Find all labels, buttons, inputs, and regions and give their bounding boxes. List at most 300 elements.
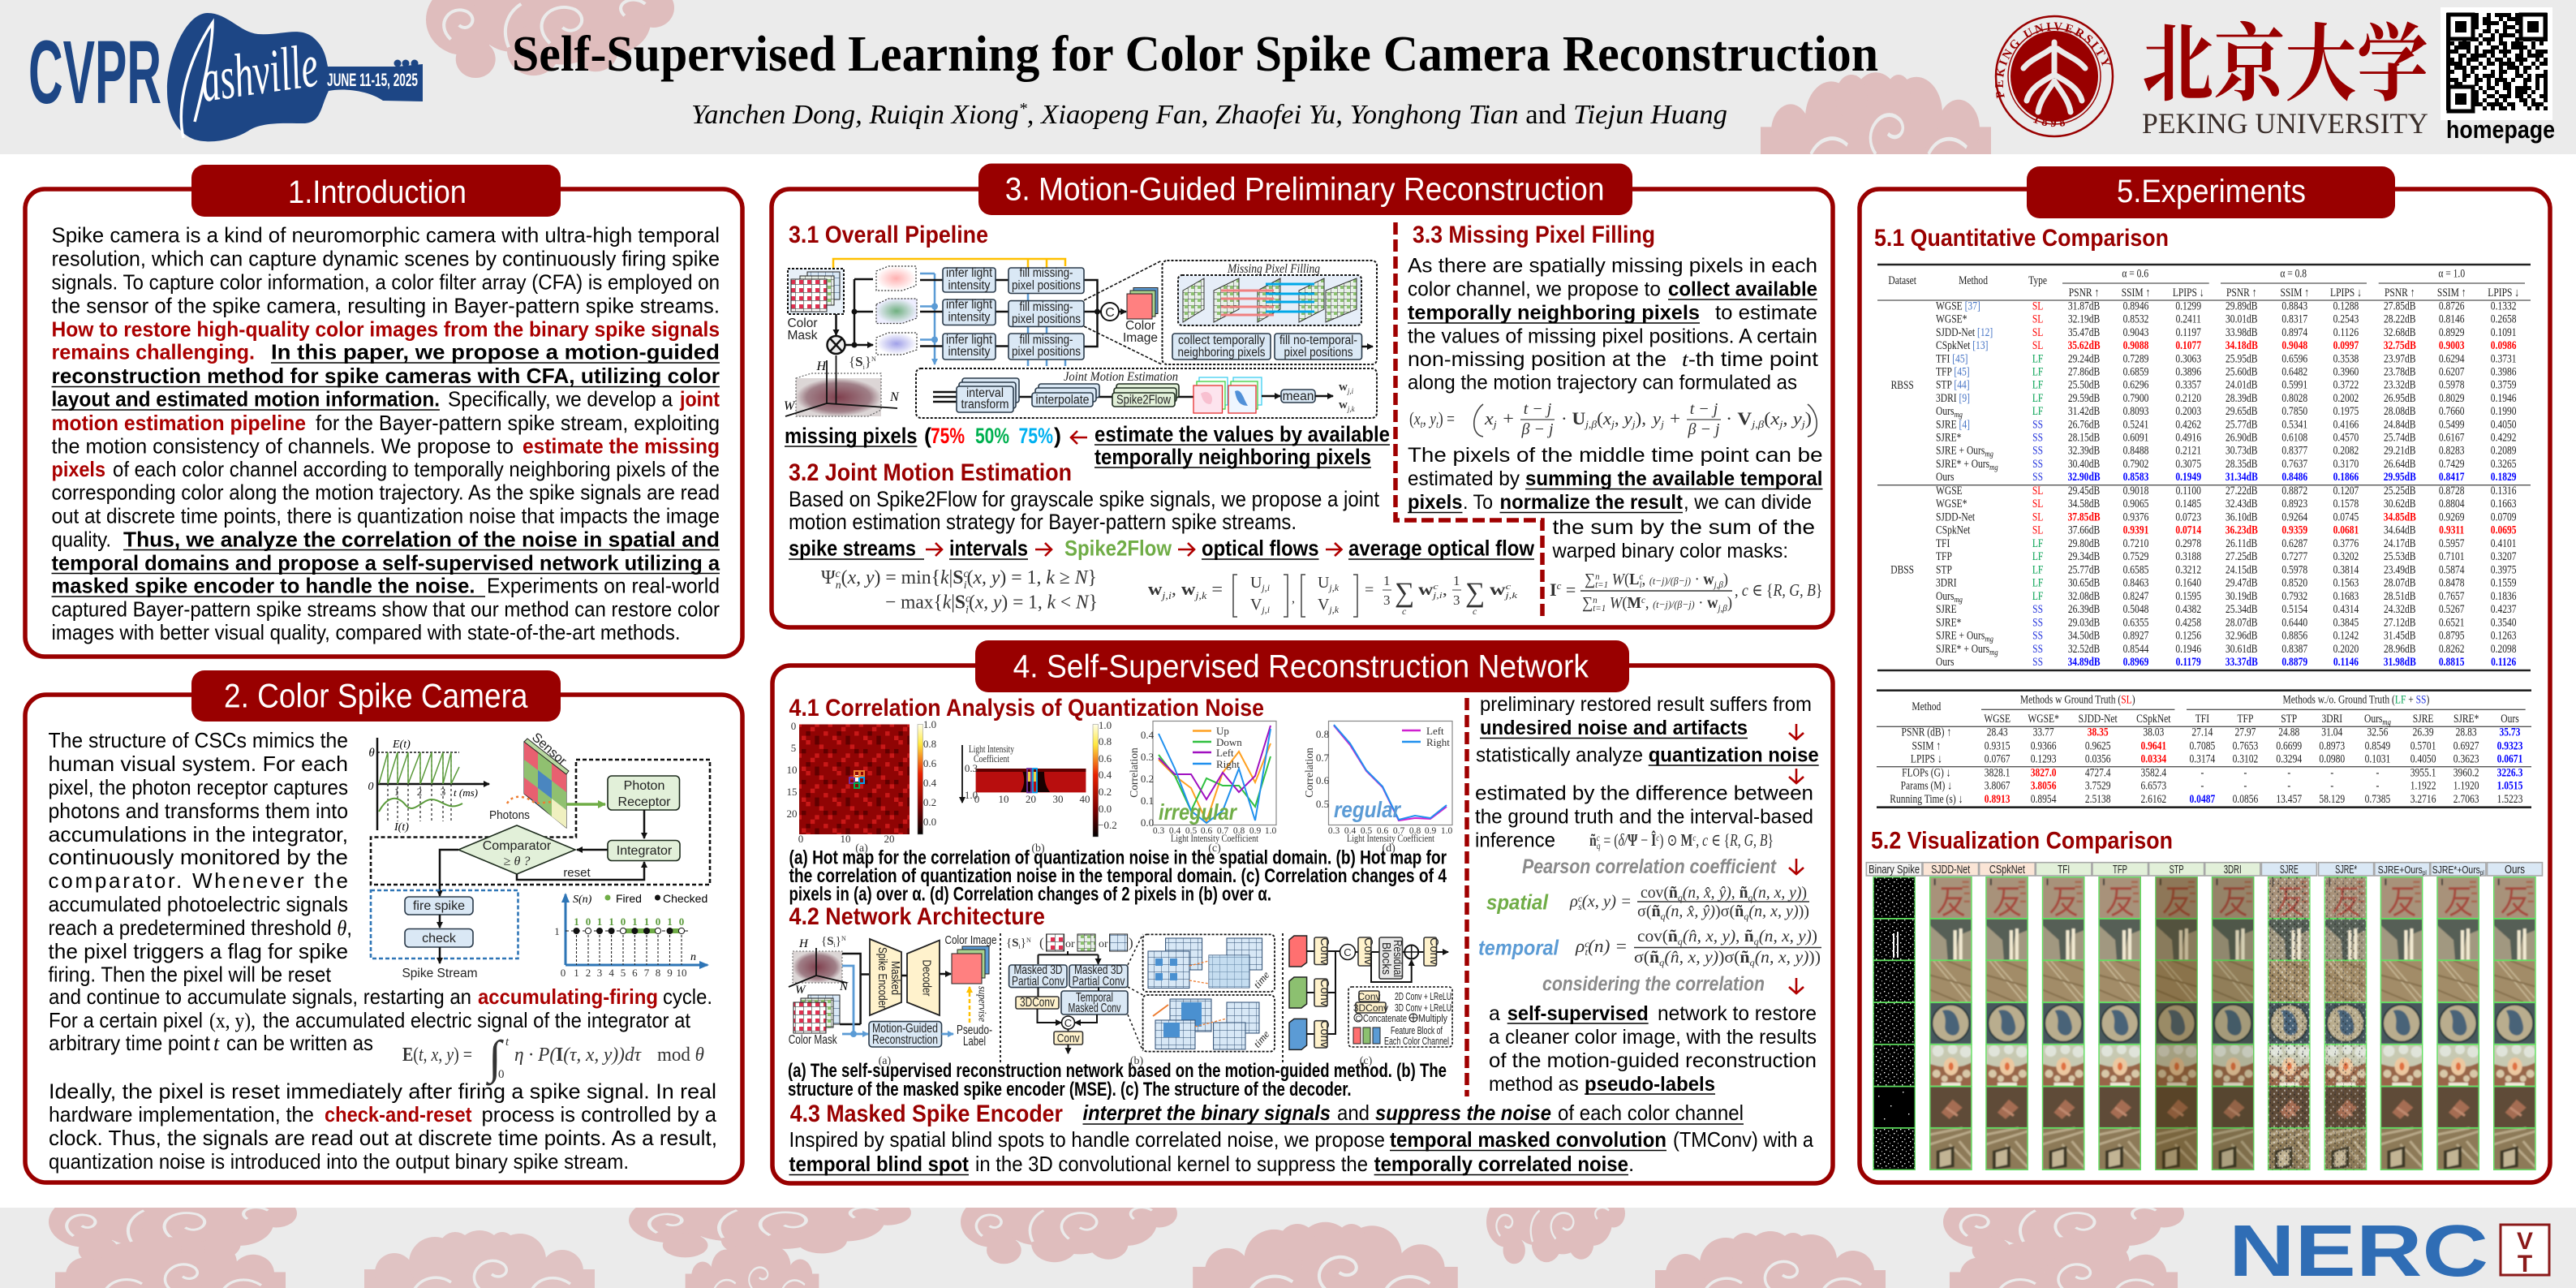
chart: (d) correlation changes, two pixels: 0.7 — [1316, 752, 1330, 764]
table: per-alpha quantitative results: 32.19dB — [2068, 312, 2100, 325]
table: real-world and complexity results: - — [2287, 765, 2290, 779]
text block: check-and-reset: hardware implementation, the — [49, 1102, 314, 1126]
equation: temporal correlation: t — [1585, 946, 1589, 958]
chart: (a) spatial hot map — [787, 718, 937, 855]
text block: CSC structure: continuously monitored by the — [49, 845, 348, 869]
table: per-alpha quantitative results: 0.3212 — [2175, 562, 2201, 576]
subheading: 5.2 Visualization Comparison: 5.2 Visualization Comparison — [1871, 828, 2173, 855]
diagram: (a) self-supervised network: N — [839, 980, 849, 993]
table: per-alpha quantitative results: WGSE* — [1936, 497, 1967, 510]
table: per-alpha quantitative results: 30.19dB — [2226, 589, 2258, 602]
diagram: (b) masked spike encoder: } — [1021, 937, 1026, 950]
text block: joint motion estimation: Based on Spike2Flow for grayscale spike signals, we propose a joint — [789, 487, 1379, 511]
chart: E(t) sawtooth and I(t): 0 — [368, 781, 373, 793]
table: per-alpha quantitative results: 0.3759 — [2491, 377, 2517, 391]
table: per-alpha quantitative results: SL — [2032, 484, 2043, 497]
table: per-alpha quantitative results: SSIM ↑ — [2280, 286, 2309, 299]
label: photons: Photons — [489, 809, 530, 822]
chart: (d) correlation changes, two pixels: 0.5 — [1316, 798, 1329, 810]
equation: motion trajectory: x — [1602, 408, 1611, 429]
table: per-alpha quantitative results: 0.8262 — [2439, 642, 2465, 655]
text block: masked spike encoder: . — [1628, 1152, 1634, 1176]
chart: spike stem plot: S(n) — [573, 894, 592, 906]
table: per-alpha quantitative results: 0.3722 — [2333, 377, 2359, 391]
chart: (b) temporal hot map: Coefficient — [974, 753, 1009, 765]
table: per-alpha quantitative results: 28.51dB — [2384, 589, 2416, 602]
table: real-world and complexity results: 2.5138 — [2085, 792, 2111, 805]
table: real-world and complexity results: 0.7085 — [2190, 739, 2216, 752]
text block: CSC structure: photons and transforms them into — [49, 799, 348, 823]
table: real-world and complexity results: 3.7529 — [2085, 778, 2111, 792]
equation: motion trajectory: (x — [1409, 408, 1422, 429]
equation: normalized color: j,β — [1717, 602, 1727, 614]
table: per-alpha quantitative results: 0.3975 — [2491, 562, 2517, 576]
equation: quantization noise: q — [1597, 840, 1600, 851]
box: photon receptor: Photon — [624, 779, 664, 793]
table: per-alpha quantitative results: 0.1091 — [2491, 325, 2517, 338]
table: real-world and complexity results: 0.9641 — [2140, 739, 2166, 752]
header row: method labels: 3DRI — [2224, 864, 2242, 877]
boxes: infer light intensity: intensity — [948, 310, 991, 325]
boxes: infer light intensity: infer light — [946, 298, 993, 312]
equation: motion trajectory: j,β — [1584, 418, 1598, 430]
text block: self-supervised network: a — [1489, 1002, 1500, 1025]
header row: method labels: SJRE* — [2335, 864, 2357, 877]
table: per-alpha quantitative results: 25.34dB — [2226, 602, 2258, 616]
logo: CVPR Nashville guitar: JUNE 11-15, 2025 — [327, 70, 418, 90]
flow: spike streams to average optical flow: optical flows — [1202, 536, 1319, 560]
table: per-alpha quantitative results: 28.07dB — [2226, 615, 2258, 629]
equation: joint flow: 3 — [1383, 592, 1391, 608]
table: per-alpha quantitative results: 30.65dB — [2068, 575, 2100, 589]
table: real-world and complexity results: 0.6927 — [2453, 739, 2479, 752]
diagram: (b) masked spike encoder: Masked 3D — [1014, 963, 1063, 977]
icon: spike volume — [784, 354, 900, 416]
chart: spike stem plot: 4 — [609, 967, 614, 979]
table: per-alpha quantitative results: LPIPS ↓ — [2330, 286, 2362, 299]
chart: (c) correlation changes, four pixels: Correlation — [1128, 747, 1140, 798]
table: per-alpha quantitative results: 30.40dB — [2068, 457, 2100, 470]
box: comparator: Comparator — [483, 839, 552, 853]
equation: normalized color: c — [1639, 571, 1644, 582]
table: per-alpha quantitative results: 0.8417 — [2439, 470, 2465, 483]
flow: spike streams to average optical flow — [789, 536, 1535, 560]
chart: spike stem plot: 1 — [632, 915, 638, 928]
table: real-world and complexity results: 0.8973 — [2319, 739, 2345, 752]
header row: method labels: SJRE — [2280, 864, 2299, 877]
chart: (a) spatial hot map: 0.8 — [923, 738, 936, 750]
equation: quantization noise: = ( — [1600, 830, 1618, 850]
chart: (d) correlation changes, two pixels: (d) — [1382, 842, 1396, 855]
table: real-world and complexity results: 1.0515 — [2497, 778, 2523, 792]
diagram: (b) masked spike encoder: Masked 3D — [1074, 963, 1123, 977]
table: per-alpha quantitative results: 32.68dB — [2384, 325, 2416, 338]
chart: (c) correlation changes, four pixels: 0.1 — [1141, 795, 1154, 807]
table: per-alpha quantitative results: 0.1146 — [2333, 655, 2359, 669]
table: per-alpha quantitative results: 0.8872 — [2281, 484, 2307, 497]
table: per-alpha quantitative results: SS — [2032, 655, 2043, 669]
table: per-alpha quantitative results: SL — [2032, 299, 2043, 312]
chart: spike stem plot: 2 — [586, 967, 591, 979]
equation: quantization noise: c ∈ {R, G, B} — [1702, 830, 1780, 850]
table: real-world and complexity results: mg — [2382, 717, 2391, 727]
text block: noise analysis flow: quantization noise — [1649, 743, 1819, 766]
chart: (b) temporal hot map: 0.2 — [1099, 786, 1112, 798]
equation: motion trajectory: ( — [1597, 408, 1603, 429]
table: per-alpha quantitative results: SJDD-Net [12] — [1936, 325, 1993, 338]
equation: accumulated signal: 0 — [498, 1068, 505, 1081]
text block: normalization: summing the available temporal — [1525, 467, 1822, 490]
chart: (b) temporal hot map: 0.6 — [1099, 752, 1112, 765]
table: per-alpha quantitative results: 0.8583 — [2123, 470, 2149, 483]
table: per-alpha quantitative results: SJRE — [1936, 602, 1957, 616]
logo: NERC: V — [2517, 1228, 2533, 1255]
callout: missing pixels: 50% — [975, 424, 1009, 448]
equation: joint flow: w — [1418, 581, 1434, 599]
table: per-alpha quantitative results: 0.1299 — [2175, 299, 2201, 312]
table: per-alpha quantitative results: 0.4258 — [2175, 615, 2201, 629]
table: per-alpha quantitative results: SS — [2032, 615, 2043, 629]
text block: introduction: images with better visual quality, compared with state-of-the-art methods. — [52, 620, 680, 644]
chart: spike stem plot: n — [690, 951, 696, 963]
icon: color mask: Mask — [787, 329, 818, 342]
table: real-world and complexity results: 2.6162 — [2140, 792, 2166, 805]
table: real-world and complexity results: 0.9625 — [2085, 739, 2111, 752]
table: per-alpha quantitative results: 0.8488 — [2123, 443, 2149, 457]
table: real-world and complexity results: 0.9315 — [1985, 739, 2010, 752]
text block: CSC structure: comparator. Whenever the — [49, 868, 348, 893]
table: per-alpha quantitative results: 34.58dB — [2068, 497, 2100, 510]
table: per-alpha quantitative results: Ours — [1936, 404, 1954, 417]
table: per-alpha quantitative results: 0.1126 — [2491, 655, 2517, 669]
box: integrator — [608, 841, 680, 860]
chart: (d) correlation changes, two pixels: 0.9 — [1425, 826, 1436, 836]
text block: noise analysis flow — [1475, 693, 1819, 851]
text block: introduction: for the Bayer-pattern spike stream, exploiting — [316, 411, 720, 435]
table: real-world and complexity results: 4727.4 — [2085, 765, 2111, 779]
table: per-alpha quantitative results: 25.53dB — [2384, 549, 2416, 563]
table: per-alpha quantitative results: 0.4101 — [2491, 536, 2517, 549]
table: per-alpha quantitative results: 0.6207 — [2439, 364, 2465, 378]
table: per-alpha quantitative results: 0.4237 — [2491, 602, 2517, 616]
text block: check-and-reset — [49, 1079, 717, 1174]
text block: masked spike encoder: temporal blind spot — [789, 1152, 969, 1176]
equation: spatial correlation: σ(ñ — [1637, 902, 1661, 920]
boxes: infer light intensity: infer light — [946, 333, 993, 347]
chart: (c) correlation changes, four pixels: 0.4 — [1169, 826, 1180, 836]
text block: introduction: reconstruction method for spike cameras with CFA, utilizing color — [52, 364, 720, 388]
table: per-alpha quantitative results: 0.8478 — [2439, 575, 2465, 589]
equation: joint flow: j,k — [1327, 582, 1340, 593]
diagram: (c) decoder: 3DConv — [1353, 1002, 1388, 1014]
diagram: (b) masked spike encoder: time — [1251, 1028, 1272, 1050]
equation: joint flow: j,i — [1160, 589, 1172, 601]
diagram: (c) decoder: 2D Conv + LReLU — [1395, 991, 1451, 1002]
text block: introduction: resolution, which can capture dynamic scenes by continuously firing spike — [52, 246, 720, 270]
heading: 3 Motion-Guided Preliminary Reconstruction: 3. Motion-Guided Preliminary Reconstruction — [1005, 172, 1605, 208]
table: real-world and complexity results: Methods w Ground Truth (SL) — [2020, 692, 2135, 706]
icon: channel cubes — [876, 266, 917, 355]
table: real-world and complexity results: 0.9366 — [2031, 739, 2057, 752]
icon: color mask — [787, 269, 844, 342]
chart: (c) correlation changes, four pixels: Down — [1216, 736, 1242, 748]
equation: interval Psi — [821, 567, 1098, 617]
table: real-world and complexity results: 0.1031 — [2365, 752, 2390, 765]
table: per-alpha quantitative results: 0.1316 — [2491, 484, 2517, 497]
text block: masked spike encoder: temporally correlated noise — [1374, 1152, 1628, 1176]
table: per-alpha quantitative results: 0.5267 — [2439, 602, 2465, 616]
table: per-alpha quantitative results: 0.8856 — [2281, 628, 2307, 642]
table: per-alpha quantitative results: 26.11dB — [2226, 536, 2257, 549]
table: real-world and complexity results: - — [2244, 778, 2247, 792]
equation: normalized color: (t−j)/(β−j) · w — [1649, 571, 1715, 588]
diagram: (b) masked spike encoder: or — [1099, 938, 1108, 950]
diagram: (c) decoder: Concatenate — [1363, 1013, 1407, 1024]
equation: joint flow: c — [1506, 582, 1511, 592]
table: per-alpha quantitative results: 0.1559 — [2491, 575, 2517, 589]
chart: (b) temporal hot map: Light Intensity — [969, 743, 1015, 755]
chart: spike stem plot: 8 — [656, 967, 660, 979]
table: real-world and complexity results: 3.2716 — [2410, 792, 2436, 805]
columns: method reconstructions — [1930, 877, 2535, 1170]
table: per-alpha quantitative results: SS — [2032, 642, 2043, 655]
header row: method labels: STP — [2170, 864, 2184, 877]
table: per-alpha quantitative results: 36.10dB — [2226, 510, 2258, 523]
table: per-alpha quantitative results: 0.1640 — [2175, 575, 2201, 589]
chart: (d) correlation changes, two pixels — [1303, 721, 1452, 855]
equation: motion trajectory: + — [1664, 408, 1681, 429]
chart: (d) correlation changes, two pixels: 0.6 — [1377, 826, 1388, 836]
text block: noise analysis flow: inference — [1475, 829, 1555, 851]
table: per-alpha quantitative results: 25.74dB — [2384, 430, 2416, 444]
text block: CSC structure: cycle. — [663, 984, 712, 1009]
heading: 4 Self-Supervised Reconstruction Network: 4. Self-Supervised Reconstruction Network — [1013, 649, 1589, 685]
table: per-alpha quantitative results: 34.50dB — [2068, 628, 2100, 642]
text block: CSC structure: can be written as — [226, 1031, 373, 1055]
diagram: (a) self-supervised network: W — [795, 984, 806, 997]
boxes: fill missing-pixel positions: fill missing- — [1019, 333, 1073, 347]
diagram: (c) decoder: Conv — [1318, 1020, 1331, 1049]
table: per-alpha quantitative results: 0.3063 — [2175, 351, 2201, 365]
caption: 4.1 figure: (a) Hot map for the correlation of quantization noise in the spatial domain. (b) Hot map for — [789, 846, 1447, 868]
text block: noise analysis flow: statistically analyze — [1476, 743, 1643, 766]
table: per-alpha quantitative results: 0.8283 — [2439, 443, 2465, 457]
table: per-alpha quantitative results: Ours — [1936, 589, 1954, 602]
equation: interval Psi: n — [836, 579, 841, 592]
chart: (a) spatial hot map: 0 — [798, 833, 803, 845]
table: real-world and complexity results: 35.73 — [2499, 725, 2521, 739]
equation: temporal correlation: ρ — [1576, 936, 1585, 956]
table: per-alpha quantitative results: WGSE* — [1936, 312, 1967, 325]
equation: motion trajectory: t — [1421, 418, 1423, 430]
column: binary spike input — [1873, 877, 1915, 1170]
logo: CVPR Nashville guitar — [28, 13, 423, 141]
table: real-world and complexity results: 0.8549 — [2365, 739, 2391, 752]
diagram: (a) self-supervised network: Masked — [888, 961, 902, 995]
chart: spike stem plot: 1 — [644, 915, 649, 928]
table: per-alpha quantitative results: 30.01dB — [2226, 312, 2258, 325]
table: real-world and complexity results: 0.3174 — [2190, 752, 2216, 765]
table: per-alpha quantitative results: LF — [2032, 404, 2043, 417]
chart: (a) spatial hot map: 0.4 — [923, 777, 937, 789]
table: per-alpha quantitative results: 28.96dB — [2384, 642, 2416, 655]
table: per-alpha quantitative results: 0.2120 — [2175, 391, 2201, 404]
table: per-alpha quantitative results: 0.3731 — [2491, 351, 2517, 365]
table: per-alpha quantitative results: 31.45dB — [2384, 628, 2416, 642]
label: considering the correlation: considering the correlation — [1542, 973, 1765, 996]
boxes: infer light intensity: infer light — [946, 266, 993, 280]
box: check: check — [422, 932, 457, 946]
text block: introduction: out at discrete time points, there is quantization noise that impacts the image — [52, 503, 720, 528]
equation: motion trajectory — [1409, 400, 1817, 438]
diagram: (c) decoder: Multiply — [1418, 1013, 1448, 1024]
chart: spike stem plot — [554, 892, 709, 979]
table: per-alpha quantitative results: 0.1288 — [2333, 299, 2359, 312]
icon: color image stack: Image — [1123, 331, 1158, 345]
table: per-alpha quantitative results: 29.24dB — [2068, 351, 2100, 365]
panel: 2 Color Spike Camera — [25, 670, 742, 1182]
table: per-alpha quantitative results: 26.90dB — [2226, 430, 2258, 444]
table: per-alpha quantitative results: 0.4570 — [2333, 430, 2359, 444]
table: real-world and complexity results: 24.88 — [2278, 725, 2300, 739]
table: per-alpha quantitative results: SS — [2032, 417, 2043, 431]
table: per-alpha quantitative results: α = 1.0 — [2438, 266, 2465, 280]
table: per-alpha quantitative results: 34.85dB — [2384, 510, 2416, 523]
text block: masked spike encoder: temporal masked convolution — [1390, 1127, 1666, 1152]
chart: (a) spatial hot map: 1.0 — [923, 718, 936, 730]
header row: method labels: pl — [2480, 869, 2484, 877]
table: per-alpha quantitative results: DBSS — [1890, 562, 1914, 576]
table: per-alpha quantitative results: 0.3896 — [2175, 364, 2201, 378]
equation: spatial correlation: q — [1661, 911, 1666, 922]
equation: accumulated signal — [402, 1031, 704, 1086]
text block: introduction: temporal domains and propose a self-supervised network utilizing a — [52, 550, 720, 575]
table: per-alpha quantitative results: SL — [2032, 510, 2043, 523]
table: per-alpha quantitative results: 24.32dB — [2384, 602, 2416, 616]
header row: method labels: Ours — [2505, 864, 2525, 877]
heading: 1.Introduction: 1.Introduction — [288, 174, 467, 210]
box: joint motion estimation detail: j,k — [1347, 405, 1356, 413]
table: real-world and complexity results: PSNR (dB) ↑ — [1902, 725, 1951, 739]
table: per-alpha quantitative results: 0.6355 — [2123, 615, 2149, 629]
chart: spike stem plot: 1 — [554, 925, 560, 937]
table: per-alpha quantitative results: 0.8728 — [2439, 484, 2465, 497]
text block: normalization: pixels — [1408, 491, 1462, 514]
table: per-alpha quantitative results: 34.18dB — [2226, 338, 2258, 351]
text block: missing pixel filling: temporally neighboring pixels — [1408, 302, 1700, 325]
table: per-alpha quantitative results: 0.1946 — [2491, 391, 2517, 404]
table: per-alpha quantitative results: 0.5499 — [2439, 417, 2465, 431]
table: per-alpha quantitative results: 0.5874 — [2439, 562, 2465, 576]
diagram: (a) self-supervised network: {S — [821, 935, 834, 948]
table: per-alpha quantitative results: Ours — [1936, 470, 1954, 483]
chart: (c) correlation changes, four pixels: 1.0 — [1265, 826, 1276, 836]
table: per-alpha quantitative results: 0.3202 — [2333, 549, 2359, 563]
equation: spatial correlation: (x, y) = — [1582, 891, 1632, 911]
text block: missing pixel filling: As there are spatially missing pixels in each — [1408, 254, 1817, 277]
table: real-world and complexity results: 38.03 — [2143, 725, 2165, 739]
equation: motion trajectory: + — [1497, 408, 1515, 429]
heading: 3 Motion-Guided Preliminary Reconstruction — [978, 164, 1632, 215]
diagram: (b) masked spike encoder: Masked Conv — [1068, 1002, 1121, 1015]
equation: joint flow: , — [1292, 592, 1295, 605]
equation: spatial correlation: spatial — [1486, 890, 1549, 915]
table: real-world and complexity results: 28.43 — [1987, 725, 2008, 739]
table: per-alpha quantitative results: STP [44] — [1936, 377, 1970, 391]
table: per-alpha quantitative results: 0.9359 — [2281, 523, 2307, 536]
table: per-alpha quantitative results: SL — [2032, 312, 2043, 325]
table: real-world and complexity results: - — [2200, 778, 2204, 792]
table: per-alpha quantitative results: 25.77dB — [2068, 562, 2100, 576]
table: per-alpha quantitative results: 0.3986 — [2491, 364, 2517, 378]
flow: spike streams to average optical flow: spike streams — [789, 536, 916, 560]
diagram: (a) self-supervised network: } — [836, 935, 841, 948]
table: real-world and complexity results: Methods w./o. Ground Truth (LF + SS) — [2283, 692, 2429, 706]
equation: temporal correlation: )σ(ñ — [1718, 947, 1749, 967]
icon: spike volume: N — [889, 390, 900, 404]
box: missing pixel filling detail — [1162, 261, 1377, 364]
table: real-world and complexity results: 38.35 — [2088, 725, 2109, 739]
table: per-alpha quantitative results: 31.98dB — [2384, 655, 2416, 669]
text block: introduction: captured Bayer-pattern spike streams show that our method can restore color — [52, 597, 720, 621]
text block: introduction: In this paper, we propose a motion-guided — [271, 339, 720, 364]
table: per-alpha quantitative results: SS — [2032, 628, 2043, 642]
text block: check-and-reset: process is controlled by a — [482, 1102, 717, 1126]
equation: spatial correlation: )σ(ñ — [1715, 902, 1744, 920]
diagram: (b) masked spike encoder: Temporal — [1076, 991, 1113, 1005]
icon: spike volume: {S — [849, 354, 863, 369]
equation: normalized color: c — [1641, 594, 1645, 605]
header row: method labels: TFP — [2113, 864, 2127, 877]
table: per-alpha quantitative results: SS — [2032, 602, 2043, 616]
diagram: (b) masked spike encoder: {S — [1006, 937, 1019, 950]
table: per-alpha quantitative results: 0.6521 — [2439, 615, 2465, 629]
diagram: (c) decoder: Conv — [1318, 937, 1331, 966]
table: real-world and complexity results: LPIPS ↓ — [1911, 752, 1942, 765]
box: joint motion estimation detail — [916, 368, 1377, 418]
equation: joint flow: j,k — [1193, 589, 1207, 601]
equation: interval Psi: i — [964, 579, 967, 592]
heading: 1.Introduction — [191, 165, 561, 217]
table: per-alpha quantitative results: 29.45dB — [2068, 484, 2100, 497]
text block: introduction: Spike camera is a kind of neuromorphic camera with ultra-high temporal — [52, 223, 720, 248]
diagram: (a) self-supervised network: Motion-Guided — [872, 1022, 938, 1036]
table: per-alpha quantitative results: LF — [2032, 589, 2043, 602]
table: real-world and complexity results: 0.0334 — [2140, 752, 2167, 765]
table: per-alpha quantitative results: 0.2082 — [2333, 443, 2359, 457]
table: per-alpha quantitative results: 0.1563 — [2333, 575, 2359, 589]
table: real-world and complexity results: - — [2244, 765, 2247, 779]
equation: joint flow: , — [1172, 579, 1181, 599]
table: per-alpha quantitative results: 0.1077 — [2175, 338, 2201, 351]
table: per-alpha quantitative results: SS — [2032, 443, 2043, 457]
chart: spike stem plot: 1 — [609, 915, 614, 928]
table: real-world and complexity results: 3960.2 — [2453, 765, 2479, 779]
table: per-alpha quantitative results: 0.4382 — [2175, 602, 2201, 616]
equation: motion trajectory: , y — [1422, 408, 1436, 429]
chart: (d) correlation changes, two pixels: 0.3 — [1328, 826, 1340, 836]
text block: introduction: the sensor of the spike camera, resulting in Bayer-pattern spike streams. — [52, 294, 720, 318]
equation: normalized color: = — [1561, 579, 1576, 600]
table: per-alpha quantitative results: 0.8726 — [2439, 299, 2465, 312]
box: comparator: ≥ θ ? — [504, 855, 530, 868]
table: per-alpha quantitative results: 37.85dB — [2068, 510, 2101, 523]
equation: normalized color: j,β — [1713, 579, 1723, 590]
text block: missing pixel filling: to estimate — [1715, 302, 1817, 325]
chart: (d) correlation changes, two pixels: 0.8 — [1316, 728, 1329, 740]
diagram: (c) decoder: Conv — [1427, 937, 1440, 966]
table: per-alpha quantitative results: 0.8879 — [2281, 655, 2307, 669]
